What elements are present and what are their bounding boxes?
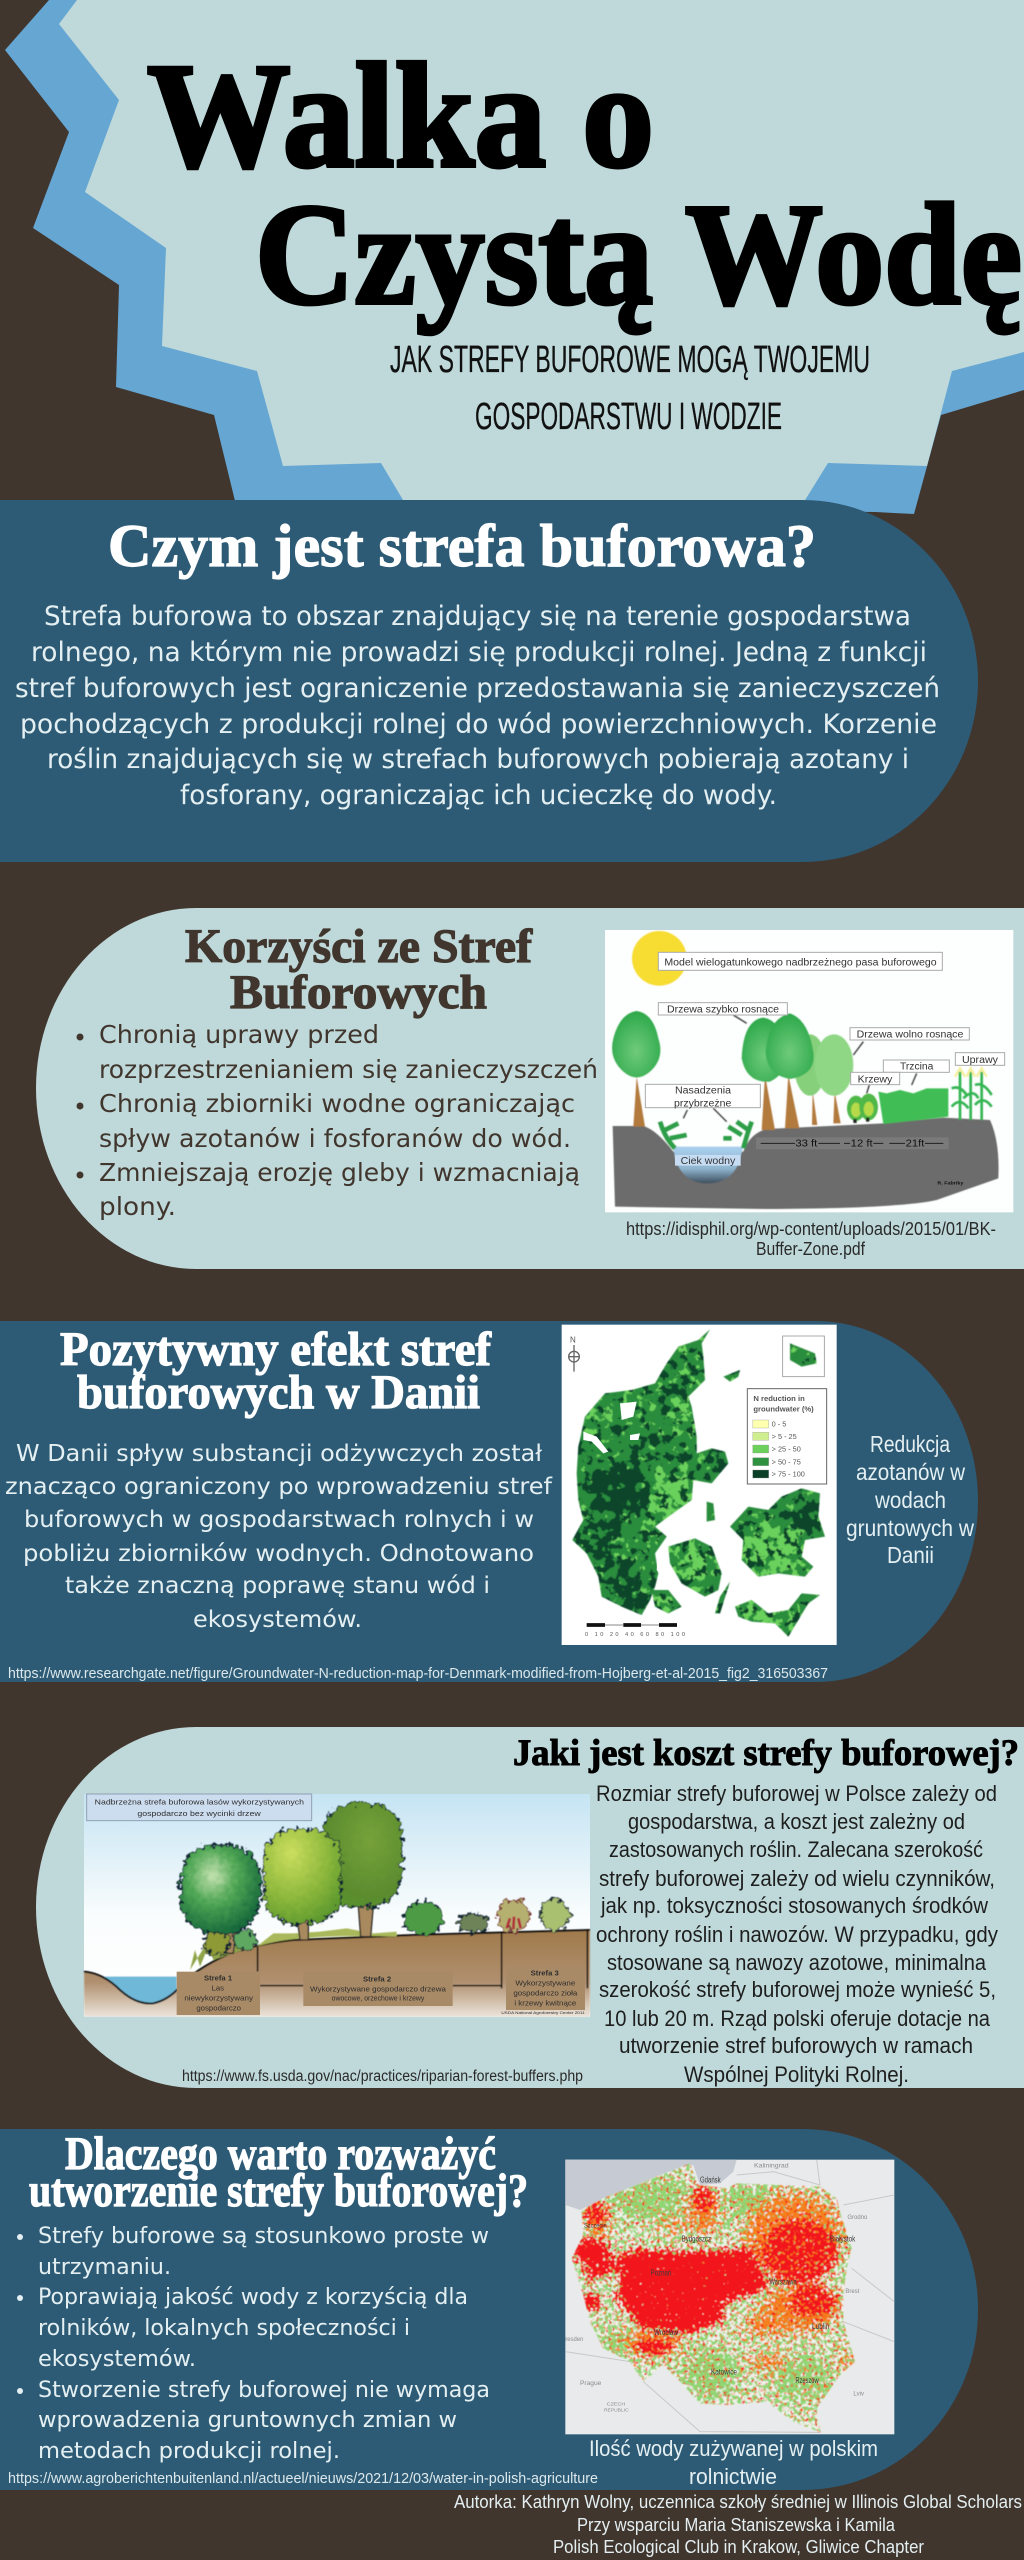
panel paragraph: Strefa buforowa to obszar znajdujący się na terenie gospodarstwa [44, 601, 911, 632]
header burst shape [5, 0, 1024, 514]
author credits: Przy wsparciu Maria Staniszewska i Kamila [577, 2514, 896, 2535]
neighbouring place labels: Kaliningrad [754, 2164, 789, 2170]
map caption: Redukcja [870, 1431, 950, 1457]
panel background [0, 500, 978, 862]
map legend: > 25 - 50 [772, 1445, 801, 1454]
city labels: Wrocław [654, 2328, 678, 2337]
city labels: Rzeszów [795, 2376, 819, 2385]
illustration labels: gospodarczo zioła [513, 1989, 578, 1998]
illustration labels: Wykorzystywane gospodarczo drzewa [310, 1984, 447, 1993]
panel heading [185, 920, 533, 1019]
panel paragraph: pobliżu zbiorników wodnych. Odnotowano [23, 1539, 534, 1567]
bullet list: spływ azotanów i fosforanów do wód. [99, 1124, 571, 1153]
illustration labels: Strefa 3 [531, 1969, 559, 1978]
panel: why consider [0, 2128, 978, 2490]
map caption: Ilość wody zużywanej w polskim [589, 2436, 878, 2461]
scale bar [585, 1625, 685, 1638]
bullet list [17, 2223, 490, 2464]
panel: benefits [36, 908, 1024, 1269]
panel paragraph: także znaczną poprawę stanu wód i [65, 1571, 490, 1599]
panel background [36, 1727, 1024, 2088]
image source link: https://www.researchgate.net/figure/Groundwater-N-reduction-map-for-Denmark-modified-from-Hojberg-et-al-2015_fig2_316503367 [8, 1666, 828, 1682]
panel background [36, 908, 1024, 1269]
bullet list: Poprawiają jakość wody z korzyścią dla [38, 2284, 468, 2310]
diagram labels: Trzcina [900, 1062, 934, 1073]
bullet list: Chronią zbiorniki wodne ograniczając [99, 1089, 575, 1118]
illustration labels: Nadbrzeżna strefa buforowa lasów wykorzystywanych [95, 1798, 304, 1807]
city labels: Białystok [830, 2235, 855, 2244]
Limfjord gaps [583, 1402, 667, 1577]
panel: what is a buffer zone [0, 500, 978, 862]
panel paragraph [5, 1439, 553, 1633]
map legend [747, 1389, 827, 1484]
city labels [584, 2175, 855, 2385]
panel paragraph: ekosystemów. [193, 1605, 362, 1633]
city labels: Bydgoszcz [682, 2235, 711, 2244]
map: water use in Polish agriculture [565, 2160, 895, 2434]
illustration labels: USDA National Agroforestry Center 2011 [501, 2010, 586, 2015]
panel paragraph: stosowane są nawozy azotowe, minimalna [607, 1950, 987, 1975]
neighbouring place labels: Grodno [847, 2215, 868, 2221]
map legend: N reduction in [753, 1394, 805, 1403]
bullet list: ekosystemów. [38, 2346, 196, 2372]
city labels: Poznań [651, 2269, 671, 2278]
neighbouring place labels [565, 2164, 868, 2413]
panel heading: Buforowych [230, 966, 487, 1019]
panel heading: Czym jest strefa buforowa? [108, 513, 816, 579]
illustration labels: i krzewy kwitnące [514, 1998, 576, 2007]
image source link: https://www.agroberichtenbuitenland.nl/actueel/nieuws/2021/12/03/water-in-polish-agriculture [8, 2470, 598, 2487]
city labels: Katowice [711, 2367, 737, 2376]
illustration labels: gospodarczo [196, 2004, 241, 2013]
panel paragraph: rolnego, na którym nie prowadzi się produkcji rolnej. Jedną z funkcji [31, 637, 927, 668]
neighbouring place labels: REPUBLIC [604, 2408, 629, 2413]
author credits: Polish Ecological Club in Krakow, Gliwice Chapter [553, 2536, 924, 2557]
map: nitrogen reduction in Denmark [562, 1324, 837, 1645]
diagram labels: Ciek wodny [681, 1156, 735, 1167]
subtitle [390, 339, 870, 438]
image source caption: https://idisphil.org/wp-content/uploads/2015/01/BK- [626, 1219, 996, 1239]
map caption: azotanów w [856, 1459, 965, 1485]
bullet list: Strefy buforowe są stosunkowo proste w [38, 2223, 489, 2249]
panel paragraph: W Danii spływ substancji odżywczych został [16, 1439, 542, 1467]
inset box [783, 1336, 824, 1377]
city labels: Szczecin [584, 2223, 607, 2230]
diagram labels: R. Fabriky [937, 1180, 964, 1185]
illustration labels: Wykorzystywane [515, 1979, 575, 1988]
panel paragraph: 10 lub 20 m. Rząd polski oferuje dotacje na [604, 2006, 991, 2031]
panel paragraph: roślin znajdujących się w strefach buforowych pobierają azotany i [47, 744, 909, 775]
diagram labels: Nasadzenia [675, 1086, 731, 1097]
panel paragraph: gospodarstwa, a koszt jest zależny od [628, 1809, 965, 1834]
panel paragraph: ochrony roślin i nawozów. W przypadku, gdy [596, 1922, 998, 1947]
diagram labels: przybrzeżne [674, 1098, 732, 1109]
panel heading: Dlaczego warto rozważyć [65, 2128, 496, 2180]
illustration labels: Strefa 1 [204, 1974, 233, 1983]
neighbouring place labels: Lviv [853, 2392, 864, 2398]
illustration labels [87, 1794, 586, 2015]
panel heading [29, 2128, 528, 2217]
panel: effect in Denmark [0, 1300, 978, 1682]
panel paragraph [15, 601, 940, 811]
scale bar: 0 10 20 40 60 80 100 [585, 1632, 685, 1638]
author credits [454, 2491, 1022, 2557]
map caption: gruntowych w [846, 1515, 974, 1541]
neighbouring place labels: Prague [580, 2381, 602, 2387]
map legend: > 5 - 25 [772, 1432, 797, 1441]
panel: cost [36, 1727, 1024, 2088]
bullet list: rolników, lokalnych społeczności i [38, 2315, 410, 2341]
panel paragraph: stref buforowych jest ograniczenie przedostawania się zanieczyszczeń [15, 673, 940, 704]
panel paragraph: strefy buforowej zależy od wielu czynników, [599, 1866, 995, 1891]
map: nitrogen reduction in Denmark: N [570, 1336, 576, 1345]
panel paragraph [596, 1781, 998, 2087]
diagram labels: Uprawy [962, 1055, 998, 1066]
neighbouring place labels: CZECH [607, 2402, 625, 2407]
bullet list: Chronią uprawy przed [99, 1020, 379, 1049]
panel paragraph: jak np. toksyczności stosowanych środków [600, 1893, 988, 1918]
image source link: https://www.fs.usda.gov/nac/practices/riparian-forest-buffers.php [182, 2068, 583, 2085]
bullet list [76, 1020, 598, 1221]
title [147, 33, 1022, 335]
panel paragraph: pochodzących z produkcji rolnej do wód powierzchniowych. Korzenie [20, 709, 937, 740]
illustration labels: Las [212, 1984, 224, 1993]
bullet list: Stworzenie strefy buforowej nie wymaga [38, 2377, 490, 2403]
illustration labels: Strefa 2 [363, 1975, 391, 1984]
diagram labels: 33 ft [795, 1138, 818, 1149]
illustration labels: gospodarczo bez wycinki drzew [137, 1809, 261, 1818]
panel paragraph: Rozmiar strefy buforowej w Polsce zależy od [596, 1781, 997, 1806]
map caption [589, 2436, 878, 2489]
map legend: > 50 - 75 [772, 1457, 801, 1466]
diagram labels: Drzewa szybko rosnące [667, 1005, 779, 1016]
illustration: riparian forest zones [84, 1794, 590, 2017]
bullet list: plony. [99, 1192, 176, 1221]
compass [568, 1345, 580, 1372]
city labels: Lublin [812, 2322, 829, 2331]
illustration labels: niewykorzystywany [184, 1994, 253, 2003]
panel heading: utworzenie strefy buforowej? [29, 2165, 528, 2217]
illustration labels: owocowe, orzechowe i krzewy [332, 1994, 424, 2003]
map legend: > 75 - 100 [772, 1470, 805, 1479]
panel paragraph: szerokość strefy buforowej może wynieść 5, [599, 1977, 996, 2002]
panel paragraph: utworzenie stref buforowych w ramach [619, 2033, 973, 2058]
bullet list: wprowadzenia gruntownych zmian w [38, 2407, 457, 2433]
bullet list: Zmniejszają erozję gleby i wzmacniają [99, 1158, 580, 1187]
neighbouring place labels: resden [565, 2337, 583, 2343]
map legend: groundwater (%) [753, 1405, 814, 1414]
panel paragraph: Wspólnej Polityki Rolnej. [684, 2062, 909, 2087]
map legend: 0 - 5 [772, 1420, 786, 1429]
panel paragraph: znacząco ograniczony po wprowadzeniu stref [5, 1472, 553, 1500]
diagram labels [645, 952, 1005, 1185]
bullet list: utrzymaniu. [38, 2254, 171, 2280]
neighbouring place labels: Brest [845, 2289, 860, 2295]
image source caption [626, 1219, 996, 1259]
bullet list: metodach produkcji rolnej. [38, 2438, 340, 2464]
panel background [0, 2129, 978, 2490]
diagram labels: Krzewy [858, 1074, 892, 1085]
diagram: multi-species riparian buffer [605, 930, 1013, 1212]
panel background [0, 1321, 978, 1682]
panel heading [60, 1323, 492, 1419]
map caption: Danii [887, 1542, 934, 1568]
map caption: rolnictwie [689, 2464, 777, 2489]
panel heading: buforowych w Danii [77, 1366, 480, 1419]
panel heading: Jaki jest koszt strefy buforowej? [513, 1733, 1019, 1774]
panel heading: Pozytywny efekt stref [60, 1323, 492, 1376]
city labels: Gdańsk [700, 2175, 721, 2184]
blue burst layer [5, 0, 1024, 514]
panel paragraph: fosforany, ograniczając ich ucieczkę do wody. [180, 780, 777, 811]
light burst layer [59, 0, 1024, 505]
panel heading: Korzyści ze Stref [185, 920, 533, 973]
panel paragraph: buforowych w gospodarstwach rolnych i w [24, 1505, 534, 1533]
diagram labels: 21ft [906, 1138, 925, 1149]
title: Walka o [147, 33, 654, 199]
image source caption: Buffer-Zone.pdf [756, 1239, 866, 1259]
map caption [846, 1431, 974, 1568]
bullet list: rozprzestrzenianiem się zanieczyszczeń [99, 1055, 598, 1084]
panel paragraph: zastosowanych roślin. Zalecana szerokość [609, 1837, 983, 1862]
diagram labels: Drzewa wolno rosnące [857, 1030, 964, 1041]
subtitle: GOSPODARSTWU I WODZIE [475, 396, 782, 438]
map caption: wodach [874, 1487, 946, 1513]
diagram labels: Model wielogatunkowego nadbrzeżnego pasa buforowego [664, 958, 937, 969]
diagram labels: 12 ft [851, 1138, 873, 1149]
city labels: Warszawa [769, 2277, 797, 2286]
